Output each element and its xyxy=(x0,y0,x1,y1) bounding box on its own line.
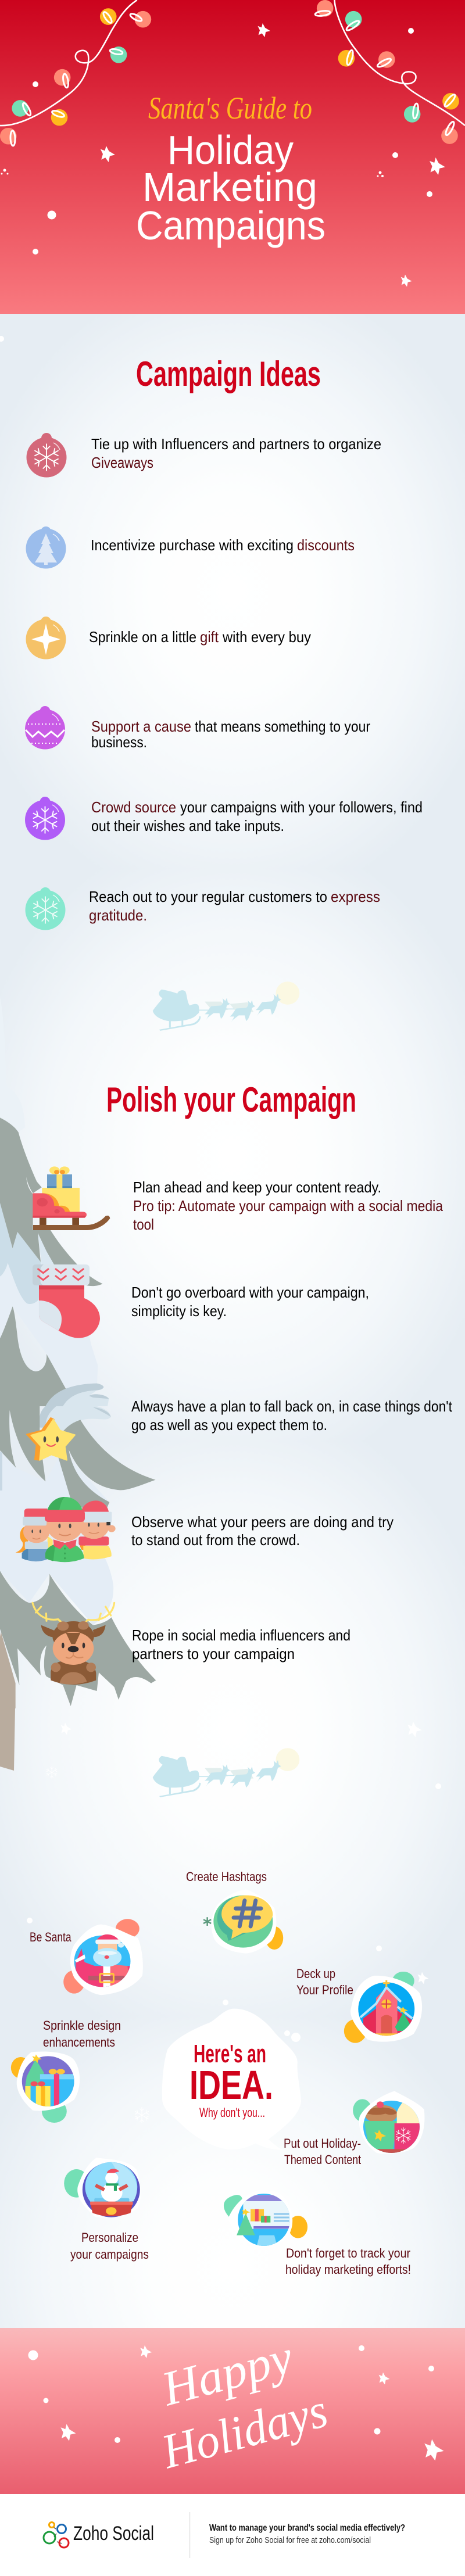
idea: sprinkle design enhancements xyxy=(11,2018,121,2123)
idea: holiday themed content xyxy=(284,2091,424,2167)
title: Holiday xyxy=(167,127,294,173)
idea: holiday themed content: Put out Holiday- xyxy=(284,2136,361,2151)
item: gift xyxy=(89,628,311,646)
speech bubble: Here's an idea xyxy=(162,2009,301,2150)
item: gift: gift xyxy=(200,628,219,646)
snow decorations xyxy=(27,1721,441,2123)
icon: stocking xyxy=(33,1264,100,1338)
icon: santa sleigh silhouette second xyxy=(153,1748,299,1797)
idea: create hashtags xyxy=(186,1869,283,1954)
idea: sprinkle design enhancements: enhancements xyxy=(43,2035,115,2050)
title: Marketing xyxy=(142,164,317,210)
call to action xyxy=(209,2523,405,2545)
footer brand panel xyxy=(0,2494,465,2576)
icon: yellow ornament xyxy=(26,617,66,659)
item: gratitude: gratitude. xyxy=(89,907,147,924)
decorative dot xyxy=(0,336,4,342)
panel: campaign ideas list xyxy=(25,433,423,930)
item: giveaways xyxy=(91,435,381,471)
item: cause: Support a cause xyxy=(91,718,191,735)
logo: Zoho Social xyxy=(44,2522,154,2548)
idea: holiday themed content: Themed Content xyxy=(284,2152,361,2167)
icon: purple ornament xyxy=(25,797,65,840)
item: peers xyxy=(131,1513,394,1549)
idea: track your marketing: Don't forget to track your xyxy=(286,2246,410,2260)
item: plan ahead: Plan ahead and keep your content ready. xyxy=(133,1178,381,1196)
title: Santa's Guide to xyxy=(148,91,312,126)
item: cause xyxy=(91,718,370,751)
item: simplicity xyxy=(131,1284,369,1320)
call to action: Sign up for Zoho Social for free at zoho.com/social xyxy=(209,2535,371,2545)
heading: Polish your Campaign: Polish your Campaign xyxy=(106,1080,356,1119)
tree top snow xyxy=(0,997,25,1132)
idea: track your marketing xyxy=(224,2190,411,2277)
item: plan b: go as well as you expect them to. xyxy=(131,1416,327,1434)
middle and lower tree branches xyxy=(0,1406,156,1708)
greeting xyxy=(156,2330,333,2480)
greeting: Happy xyxy=(156,2330,299,2417)
upper tree branches xyxy=(0,1117,109,1406)
idea: personalize your campaigns: your campaigns xyxy=(70,2247,149,2262)
idea: deck up your profile: Deck up xyxy=(296,1966,335,1981)
icon: sled with gifts xyxy=(33,1166,110,1230)
speech bubble: Here's an idea: IDEA. xyxy=(189,2062,273,2108)
tree illustration xyxy=(0,997,156,1771)
item: cause: that means something to your xyxy=(195,718,370,735)
item: crowd source: out their wishes and take inputs. xyxy=(91,817,284,834)
snow and stars xyxy=(1,23,445,287)
idea: create hashtags: Create Hashtags xyxy=(186,1869,267,1884)
heading: Campaign Ideas: Campaign Ideas xyxy=(136,354,321,393)
header panel xyxy=(0,0,465,314)
call to action: Want to manage your brand's social media effectively? xyxy=(209,2523,405,2533)
item: peers: Observe what your peers are doing and try xyxy=(131,1513,394,1531)
idea: personalize your campaigns: Personalize xyxy=(81,2230,138,2245)
logo: Zoho Social: Zoho Social xyxy=(73,2523,154,2545)
idea: track your marketing: holiday marketing efforts! xyxy=(285,2262,411,2277)
item: giveaways: Giveaways xyxy=(91,454,153,471)
item: influencers: Rope in social media influencers and xyxy=(132,1626,350,1644)
icon: three elves xyxy=(16,1497,116,1562)
footer snow and stars xyxy=(28,2345,444,2460)
icon: red ornament xyxy=(27,433,66,478)
item: discounts: Incentivize purchase with exciting xyxy=(91,536,294,554)
idea: be santa: Be Santa xyxy=(30,1930,71,1944)
icon: reindeer xyxy=(33,1603,115,1685)
item: peers: to stand out from the crowd. xyxy=(131,1531,300,1549)
item: giveaways: Tie up with Influencers and partners to organize xyxy=(91,435,381,453)
idea: deck up your profile xyxy=(296,1966,422,2043)
panel: polish your campaign list xyxy=(16,1166,453,1685)
panel: idea cluster xyxy=(11,1869,424,2277)
item: cause: business. xyxy=(91,733,147,751)
item: discounts: discounts xyxy=(297,536,355,554)
speech bubble: Here's an idea: Why don't you... xyxy=(199,2105,265,2120)
idea: be santa xyxy=(30,1919,143,1995)
title xyxy=(136,91,326,248)
item: influencers: partners to your campaign xyxy=(132,1645,295,1663)
item: influencers xyxy=(132,1626,350,1663)
idea: personalize your campaigns xyxy=(64,2158,149,2262)
item: simplicity: simplicity is key. xyxy=(131,1302,227,1320)
item: gratitude: Reach out to your regular customers to xyxy=(89,888,327,905)
item: gift: with every buy xyxy=(222,628,311,646)
greeting: Holidays xyxy=(156,2383,333,2480)
icon: smiling star xyxy=(27,1418,75,1460)
icon: blue ornament xyxy=(26,526,66,568)
footer greeting panel xyxy=(0,2328,465,2494)
speech bubble: Here's an idea: Here's an xyxy=(194,2040,266,2068)
item: crowd source xyxy=(91,798,423,834)
item: plan ahead xyxy=(133,1178,443,1233)
title: Campaigns xyxy=(136,203,326,248)
item: simplicity: Don't go overboard with your campaign, xyxy=(131,1284,369,1301)
divider xyxy=(189,2512,190,2558)
item: crowd source: Crowd source xyxy=(91,798,176,816)
idea: deck up your profile: Your Profile xyxy=(296,1983,353,1997)
item: gift: Sprinkle on a little xyxy=(89,628,196,646)
icon: pink ornament xyxy=(25,706,65,750)
item: gratitude: express xyxy=(331,888,380,905)
item: plan b xyxy=(131,1398,453,1434)
tree trunk base xyxy=(0,1707,15,1771)
icon: mint ornament xyxy=(26,887,65,930)
bulb highlights xyxy=(10,10,456,146)
icon: santa sleigh silhouette xyxy=(153,981,299,1031)
idea: sprinkle design enhancements: Sprinkle design xyxy=(43,2018,121,2033)
item: gratitude xyxy=(89,888,380,924)
item: plan ahead: tool xyxy=(133,1216,154,1233)
item: crowd source: your campaigns with your followers, find xyxy=(180,798,423,816)
string lights xyxy=(0,0,465,145)
